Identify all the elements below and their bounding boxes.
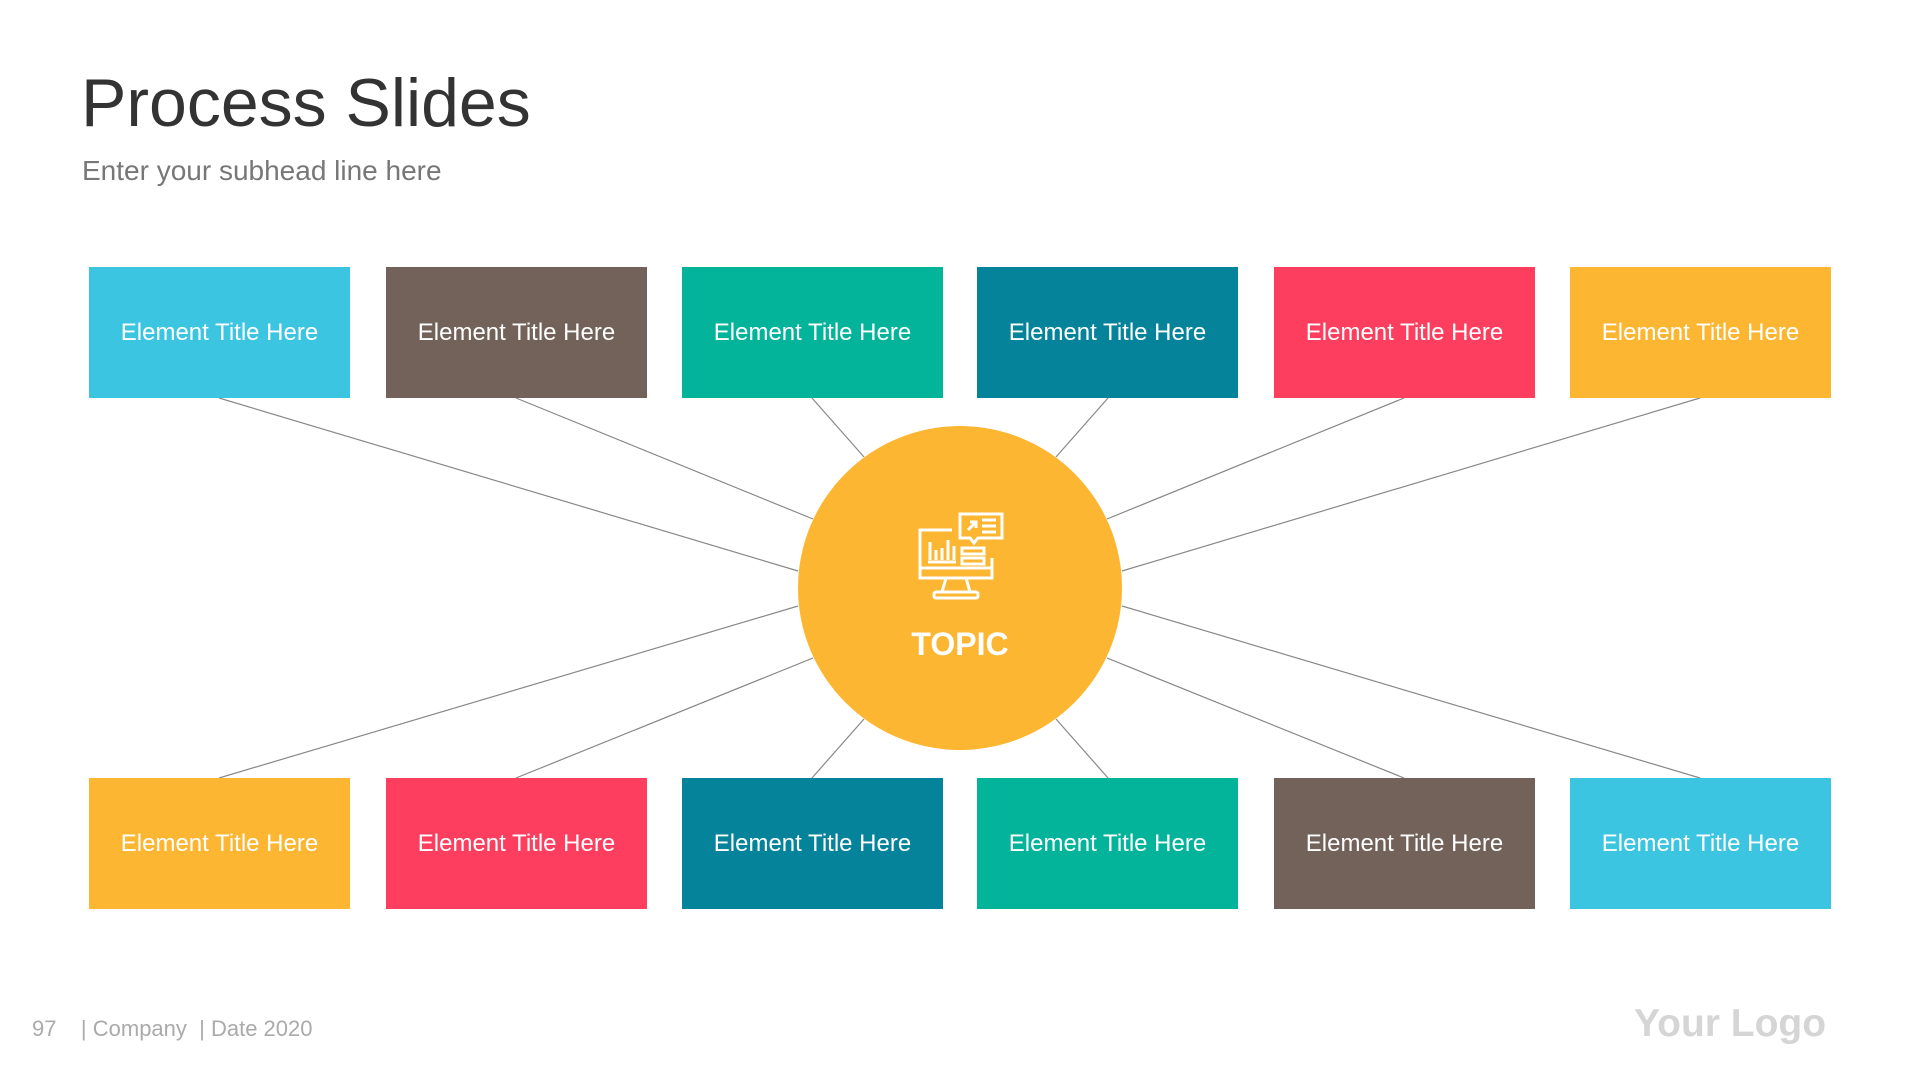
text: Element Title Here [1009, 830, 1206, 856]
text: Element Title Here [1602, 318, 1799, 346]
text: Element Title Here [121, 830, 318, 856]
text: Element Title Here [121, 318, 318, 346]
text: Element Title Here [418, 830, 615, 856]
text: Element Title Here [418, 318, 615, 346]
top row boxes [89, 267, 1831, 398]
bottom row boxes [89, 778, 1831, 909]
text: Element Title Here [714, 830, 911, 856]
text: Element Title Here [1306, 318, 1503, 346]
icon: monitor with chart [918, 512, 1004, 600]
text: Element Title Here [1009, 318, 1206, 346]
text: Element Title Here [1602, 830, 1799, 856]
topic label: TOPIC [911, 626, 1009, 662]
text: Element Title Here [1306, 830, 1503, 856]
subhead: Enter your subhead line here [82, 155, 442, 186]
logo: Your Logo [1634, 1002, 1826, 1045]
central topic circle [798, 426, 1122, 750]
footer: 97 | Company | Date 2020 [32, 1016, 312, 1041]
text: Element Title Here [714, 318, 911, 346]
title: Process Slides [81, 65, 531, 141]
